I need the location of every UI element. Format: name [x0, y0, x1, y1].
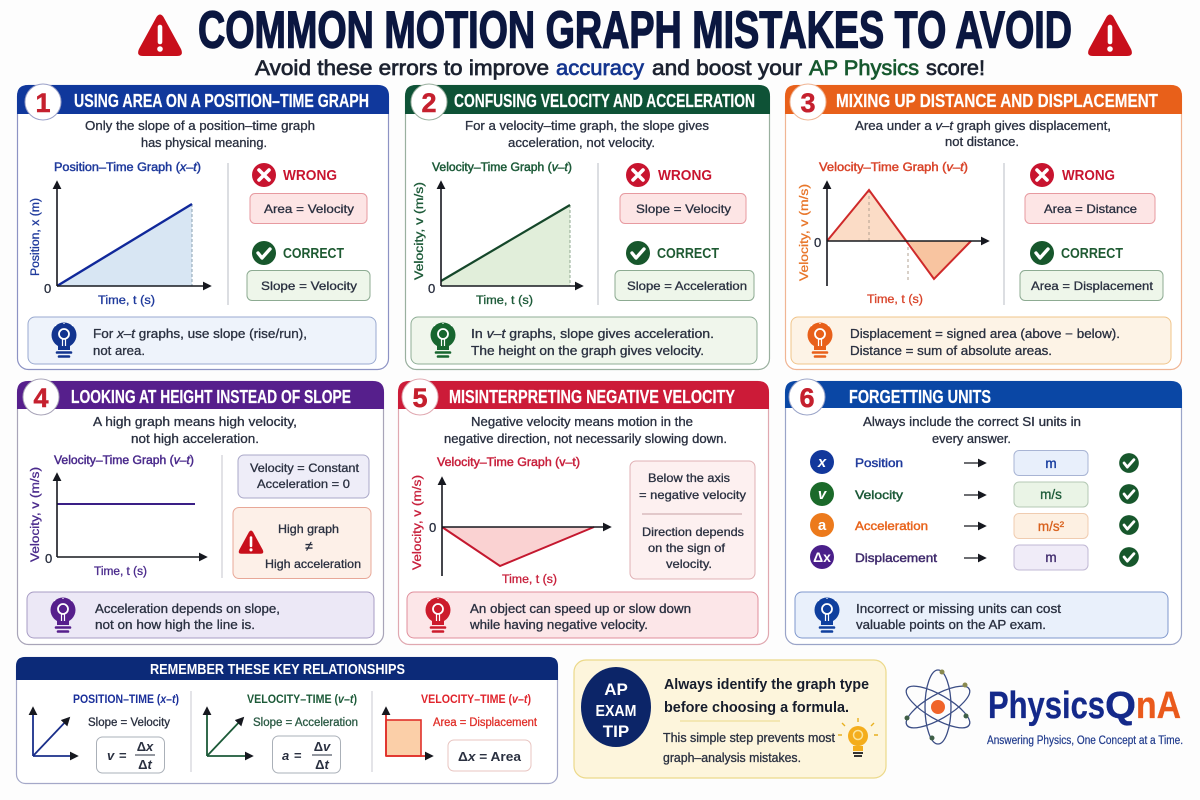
tip 3 — [791, 317, 1171, 364]
chart: constant velocity: 0 — [45, 551, 52, 566]
tip 1: For x–t graphs, use slope (rise/run), — [93, 327, 307, 341]
icon: warning right — [1088, 14, 1132, 56]
panel 4: looking at height instead of slope — [17, 379, 384, 644]
callout: constant velocity: Velocity = Constant — [250, 461, 360, 475]
tip 5: while having negative velocity. — [469, 618, 648, 632]
heading 2: CONFUSING VELOCITY AND ACCELERATION — [454, 91, 755, 111]
heading 6: FORGETTING UNITS — [849, 387, 991, 407]
wrong 1: WRONG — [283, 168, 337, 184]
logo: PhysicsQnA — [901, 670, 1183, 747]
chart: velocity-time graph rising: Time, t (s) — [476, 295, 533, 307]
relationship: velocity-time area: Δx = Area — [458, 749, 522, 764]
row: position — [810, 450, 1139, 476]
correct 3: CORRECT — [1061, 246, 1123, 262]
chart: velocity-time graph rising: 0 — [428, 281, 435, 296]
number badge 2 — [411, 84, 447, 120]
chart: constant velocity: Time, t (s) — [94, 566, 147, 578]
tip 2: In v–t graphs, slope gives acceleration. — [471, 327, 714, 341]
panel 2: confusing velocity and acceleration — [405, 84, 770, 370]
callout: high graph — [233, 508, 371, 578]
description 3: not distance. — [945, 135, 1019, 149]
callout: constant velocity: Acceleration = 0 — [257, 477, 350, 491]
tip 2 — [411, 317, 757, 364]
tip 4: Acceleration depends on slope, — [95, 602, 280, 616]
tip body: This simple step prevents most — [663, 731, 836, 745]
callout: below the axis — [630, 461, 755, 579]
tip heading: before choosing a formula. — [664, 699, 849, 716]
relationships heading: REMEMBER THESE KEY RELATIONSHIPS — [150, 662, 405, 678]
row: acceleration — [810, 513, 1139, 538]
panel: remember these key relationships — [16, 657, 558, 784]
number badge 3: 3 — [800, 88, 816, 118]
chart: velocity-time triangles: Velocity, v (m/s) — [799, 184, 811, 281]
AP exam tip badge: AP — [604, 680, 628, 699]
header bar 3 — [785, 85, 1182, 114]
chart: position-time graph: 0 — [44, 281, 51, 296]
row: velocity: m/s — [1040, 487, 1062, 502]
logo wordmark: Q — [1105, 685, 1136, 727]
description 2: For a velocity–time graph, the slope gives — [465, 119, 709, 133]
number badge 5: 5 — [412, 383, 428, 413]
tip 3: Distance = sum of absolute areas. — [850, 344, 1052, 358]
relationship: velocity-time area: VELOCITY–TIME (v–t) — [421, 694, 531, 706]
description 1 — [85, 119, 315, 150]
relationship: velocity-time slope: VELOCITY–TIME (v–t) — [247, 694, 357, 706]
panel 6: forgetting units — [785, 379, 1182, 644]
row: velocity: v — [818, 486, 828, 503]
row: acceleration: Acceleration — [855, 519, 928, 533]
description 2: acceleration, not velocity. — [508, 136, 655, 150]
description 1: has physical meaning. — [141, 136, 267, 150]
tip 1: not area. — [93, 344, 145, 358]
chart: velocity-time triangles — [799, 162, 988, 306]
tip 3: Displacement = signed area (above − below). — [850, 327, 1120, 341]
tip 5 — [407, 592, 758, 638]
wrong 2: WRONG — [658, 168, 712, 184]
callout: below the axis: on the sign of — [648, 541, 726, 555]
description 4: not high acceleration. — [131, 432, 259, 446]
callout: constant velocity — [238, 455, 369, 498]
row: displacement: m — [1045, 550, 1057, 565]
number badge 2: 2 — [421, 88, 437, 118]
chart: negative velocity — [412, 457, 610, 586]
correct 2: CORRECT — [657, 246, 719, 262]
heading 1: USING AREA ON A POSITION–TIME GRAPH — [74, 91, 369, 111]
description 6 — [863, 415, 1081, 446]
tip heading — [664, 676, 869, 716]
tip 2: The height on the graph gives velocity. — [471, 344, 704, 358]
chart: position-time graph: Position–Time Graph ( x–t) — [54, 162, 201, 174]
number badge 1: 1 — [35, 88, 51, 118]
relationship: position-time: Δt — [138, 757, 152, 772]
correct 2 — [615, 241, 754, 300]
row: position: x — [817, 454, 827, 471]
correct 3: Area = Displacement — [1031, 279, 1154, 293]
chart: position-time graph: Position, x (m) — [30, 198, 42, 276]
tip 6: Incorrect or missing units can cost — [856, 602, 1062, 616]
header — [138, 2, 1132, 80]
relationship: velocity-time slope: a — [282, 748, 289, 763]
chart: negative velocity: Time, t (s) — [502, 574, 557, 586]
chart: velocity-time graph rising: Velocity–Time Graph ( v–t) — [432, 162, 572, 174]
subtitle: AP Physics — [809, 57, 919, 80]
panel 5: misinterpreting negative velocity — [398, 379, 769, 644]
chart: velocity-time graph rising — [414, 162, 582, 307]
AP exam tip badge: EXAM — [596, 703, 636, 720]
relationship: position-time: POSITION–TIME (x–t) — [73, 694, 179, 706]
icon: atom — [901, 670, 975, 744]
panel 3: mixing up distance and displacement — [785, 84, 1182, 370]
relationship: velocity-time area — [386, 694, 538, 771]
chart: negative velocity: 0 — [429, 520, 436, 535]
wrong 3: Area = Distance — [1044, 202, 1137, 216]
icon: warning left — [138, 14, 182, 56]
callout: below the axis: = negative velocity — [639, 488, 746, 502]
callout: high graph: ≠ — [305, 538, 313, 554]
chart: position-time graph — [30, 162, 210, 307]
heading 4: LOOKING AT HEIGHT INSTEAD OF SLOPE — [71, 387, 351, 407]
subtitle — [255, 57, 985, 80]
chart: velocity-time triangles: 0 — [814, 235, 821, 250]
header bar 6 — [785, 381, 1182, 408]
description 5: negative direction, not necessarily slowing down. — [444, 432, 727, 446]
row: displacement — [810, 545, 1139, 570]
tip body: graph–analysis mistakes. — [663, 751, 801, 765]
description 6: every answer. — [932, 432, 1011, 446]
correct 1 — [247, 241, 370, 300]
number badge 6 — [789, 379, 825, 415]
callout: below the axis: Direction depends — [642, 525, 744, 539]
relationship: position-time: Slope = Velocity — [88, 717, 170, 729]
tip 6 — [795, 592, 1168, 638]
chart: velocity-time triangles: Time, t (s) — [867, 294, 923, 306]
row: acceleration: m/s² — [1038, 519, 1065, 534]
wrong 1: Area = Velocity — [264, 202, 354, 216]
chart: velocity-time triangles: Velocity–Time Graph ( v–t) — [819, 162, 968, 174]
chart: position-time graph: Time, t (s) — [98, 295, 155, 307]
number badge 3 — [790, 84, 826, 120]
relationship: velocity-time slope: Δt — [315, 757, 330, 772]
logo wordmark: nA — [1136, 685, 1181, 727]
callout: below the axis: velocity. — [666, 557, 712, 571]
description 3: Area under a v–t graph gives displacement, — [855, 119, 1111, 133]
AP exam tip badge — [581, 667, 651, 747]
row: position: Position — [855, 456, 903, 470]
description 6: Always include the correct SI units in — [863, 415, 1081, 429]
relationship: position-time — [33, 694, 179, 773]
number badge 1 — [25, 84, 61, 120]
chart: constant velocity — [30, 455, 206, 578]
subtitle: Avoid these errors to improve — [255, 57, 549, 80]
relationships header — [16, 657, 558, 680]
wrong 3: WRONG — [1062, 168, 1115, 184]
subtitle: accuracy — [556, 57, 645, 80]
wrong 2 — [620, 163, 746, 224]
callout: high graph: High acceleration — [265, 557, 361, 571]
row: velocity — [810, 482, 1139, 507]
row: velocity: Velocity — [855, 488, 903, 502]
relationship: position-time: v — [107, 748, 115, 763]
relationship: velocity-time area: Area = Displacement — [433, 717, 538, 729]
tip 1 — [28, 317, 376, 364]
wrong 3 — [1025, 163, 1155, 224]
relationship: position-time: = — [119, 748, 127, 763]
correct 3 — [1020, 241, 1163, 300]
wrong 2: Slope = Velocity — [636, 202, 731, 216]
relationship: velocity-time slope: Δv — [314, 739, 331, 754]
logo wordmark: Physics — [988, 685, 1105, 727]
number badge 6: 6 — [799, 383, 815, 413]
relationship: velocity-time slope: = — [294, 748, 302, 763]
tip body — [663, 731, 836, 765]
callout: high graph: High graph — [278, 522, 339, 536]
tip heading: Always identify the graph type — [664, 676, 869, 693]
header bar 2 — [405, 85, 770, 114]
wrong 1 — [250, 163, 367, 224]
description 5: Negative velocity means motion in the — [471, 415, 693, 429]
correct 2: Slope = Acceleration — [627, 279, 747, 293]
tip 5: An object can speed up or slow down — [470, 602, 691, 616]
description 4 — [93, 415, 297, 446]
heading 5: MISINTERPRETING NEGATIVE VELOCITY — [449, 387, 735, 407]
row: displacement: Displacement — [855, 551, 938, 565]
description 2 — [465, 119, 709, 150]
chart: velocity-time graph rising: Velocity, v (m/s) — [414, 182, 426, 280]
description 1: Only the slope of a position–time graph — [85, 119, 315, 133]
chart: constant velocity: Velocity, v (m/s) — [30, 467, 42, 562]
AP exam tip badge: TIP — [603, 722, 629, 741]
relationship: velocity-time slope: Slope = Acceleration — [253, 717, 358, 729]
header bar 5 — [398, 381, 769, 409]
header bar 1 — [17, 85, 389, 114]
correct 1: CORRECT — [283, 246, 344, 262]
number badge 5 — [402, 379, 438, 415]
callout: AP exam tip — [574, 660, 886, 778]
row: displacement: Δx — [813, 549, 831, 565]
chart: negative velocity: Velocity, v (m/s) — [412, 475, 424, 570]
panel 1: using area on a position-time graph — [17, 84, 389, 370]
number badge 4 — [23, 379, 59, 415]
subtitle: and boost your — [652, 57, 802, 80]
relationship: velocity-time slope — [207, 694, 358, 773]
number badge 4: 4 — [33, 383, 49, 413]
subtitle: score! — [926, 57, 985, 80]
row: acceleration: a — [818, 517, 827, 534]
chart: constant velocity: Velocity–Time Graph ( v–t) — [54, 455, 194, 467]
row: position: m — [1045, 456, 1057, 471]
correct 1: Slope = Velocity — [261, 279, 357, 293]
description 3 — [855, 119, 1111, 149]
callout: below the axis: Below the axis — [648, 471, 730, 485]
icon: yellow bulb — [838, 718, 878, 756]
chart: negative velocity: Velocity–Time Graph (v–t) — [437, 457, 580, 469]
header bar 4 — [17, 381, 384, 409]
relationship: position-time: Δx — [137, 739, 154, 754]
tip 4 — [27, 592, 374, 638]
tip 6: valuable points on the AP exam. — [856, 618, 1046, 632]
description 5 — [444, 415, 727, 446]
description 4: A high graph means high velocity, — [93, 415, 297, 429]
tip 4: not on how high the line is. — [95, 618, 255, 632]
